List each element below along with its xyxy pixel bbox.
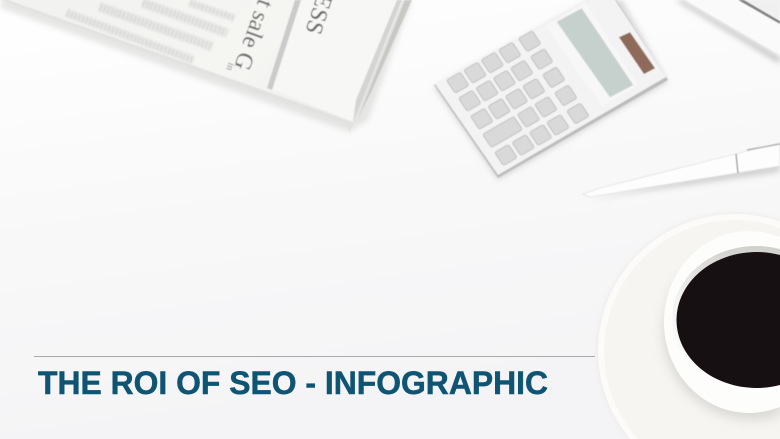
pen [583, 143, 780, 199]
saucer [598, 214, 780, 439]
divider line [34, 356, 595, 358]
calculator [434, 0, 668, 180]
calculator display panel [545, 2, 638, 106]
coffee [676, 252, 780, 388]
calculator keys [446, 31, 589, 166]
newspaper [0, 0, 412, 132]
coffee cup [664, 231, 780, 419]
calculator display [557, 8, 633, 97]
newspaper column text blocks [67, 3, 234, 60]
calculator solar cell [619, 32, 655, 74]
device in top right corner [675, 0, 780, 64]
title: THE ROI OF SEO - INFOGRAPHIC [38, 365, 548, 401]
newspaper small print: in [224, 61, 237, 72]
